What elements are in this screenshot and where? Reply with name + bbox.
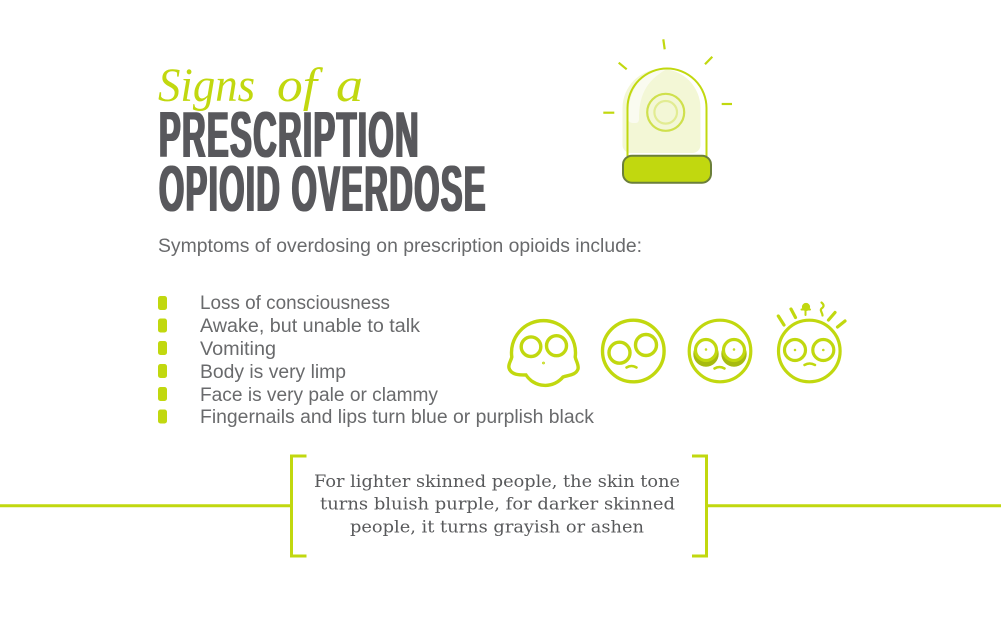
list items: Face is very pale or clammy	[200, 385, 438, 406]
list items: Body is very limp	[200, 362, 346, 383]
title: PRESCRIPTION	[159, 98, 420, 171]
connector lines	[0, 504, 1001, 507]
icon: panicked face with sweat marks	[778, 302, 845, 382]
brackets	[292, 456, 706, 556]
icon: face with swollen cheeks	[509, 321, 578, 385]
callout	[0, 456, 1001, 556]
title script line: a	[336, 59, 363, 112]
title script line	[158, 59, 363, 112]
callout text	[314, 472, 680, 536]
icon: face with heavy eyes	[689, 320, 751, 382]
callout text: people, it turns grayish or ashen	[350, 518, 644, 536]
list items	[200, 293, 595, 428]
list items: Vomiting	[200, 339, 276, 360]
icon: siren alarm	[603, 39, 732, 183]
title script line: Signs	[158, 59, 255, 112]
icon: face with uneven eyes	[602, 320, 664, 382]
list items: Fingernails and lips turn blue or purplish black	[200, 407, 595, 428]
callout text: turns bluish purple, for darker skinned	[320, 494, 675, 514]
intro text: Symptoms of overdosing on prescription opioids include:	[158, 236, 642, 257]
symptoms list	[158, 293, 595, 428]
infographic canvas: OPIOID OVERDOSE	[159, 152, 487, 225]
callout text: For lighter skinned people, the skin tone	[314, 472, 680, 491]
title script line: of	[277, 59, 323, 112]
list items: Awake, but unable to talk	[200, 316, 421, 337]
list bullets	[158, 296, 167, 424]
title	[158, 59, 487, 225]
list items: Loss of consciousness	[200, 293, 390, 314]
